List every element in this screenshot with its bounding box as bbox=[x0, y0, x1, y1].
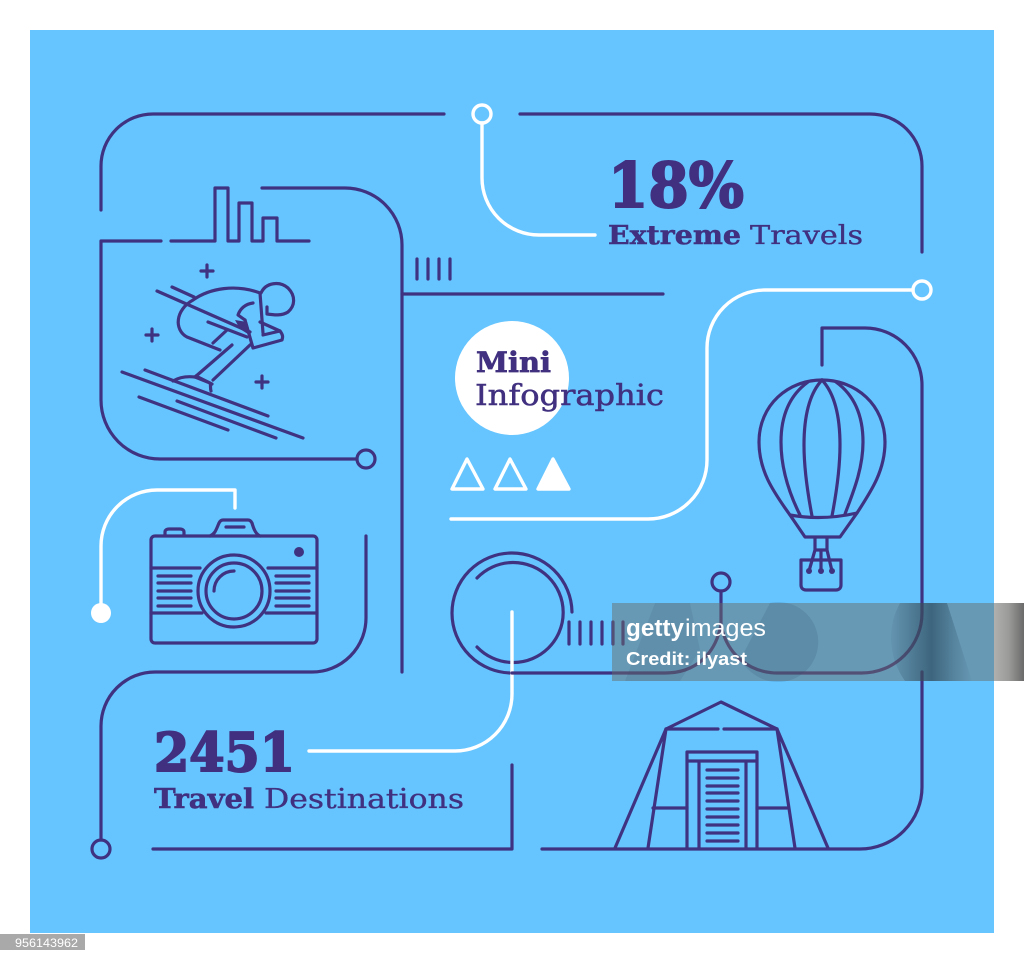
outline: center divider with ticks bbox=[262, 188, 663, 672]
watermark: getty images credit band bbox=[612, 602, 1024, 682]
connector: camera white line with node bbox=[91, 490, 235, 623]
icon: tent bbox=[615, 702, 828, 848]
heading: 18% extreme travels: 18% bbox=[608, 149, 744, 222]
icon: skyline bars bbox=[171, 188, 309, 241]
title: mini infographic bbox=[455, 321, 664, 435]
icon: camera bbox=[151, 520, 317, 643]
outline: lower left frame with node bbox=[92, 536, 366, 858]
connector: right white line with node bbox=[451, 281, 931, 519]
title: mini infographic: Mini bbox=[476, 346, 551, 379]
heading: 18% extreme travels: Extreme bbox=[608, 221, 741, 251]
label: image id bbox=[0, 934, 85, 950]
heading: 2451 travel destinations: Destinations bbox=[264, 784, 464, 815]
watermark: getty images credit band: Credit: ilyast bbox=[626, 649, 747, 669]
heading: 18% extreme travels: Travels bbox=[750, 221, 863, 251]
watermark: getty images credit band: getty bbox=[626, 615, 685, 642]
connector: top white line with node bbox=[473, 105, 595, 235]
icon: ring with ticks bbox=[452, 553, 623, 673]
icon: skier bbox=[122, 265, 303, 438]
outline: bottom frame bbox=[153, 672, 922, 849]
icon: hot air balloon bbox=[759, 380, 885, 590]
title: mini infographic: Infographic bbox=[475, 378, 664, 412]
heading: 2451 travel destinations bbox=[154, 722, 464, 815]
heading: 18% extreme travels bbox=[608, 149, 863, 251]
watermark: getty images credit band: images bbox=[685, 615, 766, 642]
heading: 2451 travel destinations: Travel bbox=[154, 784, 254, 815]
label: image id: 956143962 bbox=[15, 936, 78, 950]
heading: 2451 travel destinations: 2451 bbox=[154, 722, 295, 784]
outline: top frame bbox=[101, 114, 922, 252]
outline: lower right frame with node bbox=[512, 328, 922, 673]
icon: three triangles bbox=[452, 459, 569, 489]
outline: skier panel with node bbox=[101, 241, 375, 468]
connector: ring white line bbox=[309, 612, 512, 751]
